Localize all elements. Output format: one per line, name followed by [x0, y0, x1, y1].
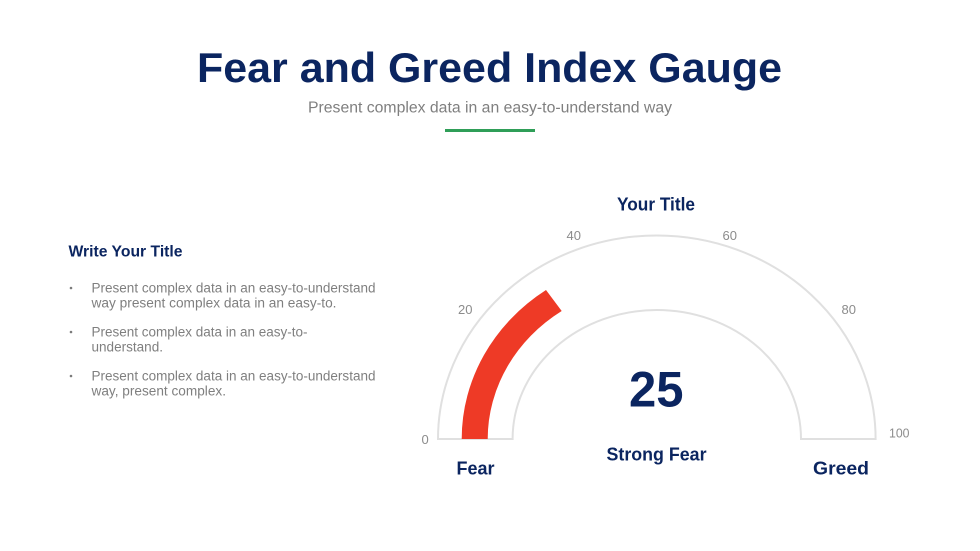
bullet 3: way, present complex.	[90, 384, 226, 398]
text column heading: Write Your Title	[68, 244, 183, 260]
gauge heading: Your Title	[617, 194, 695, 214]
greed label: Greed	[813, 458, 869, 478]
bullet 3	[70, 368, 375, 398]
fear label: Fear	[456, 458, 494, 478]
scale labels	[422, 228, 910, 447]
gauge track outline	[438, 235, 876, 439]
scale labels: 80	[842, 302, 856, 317]
scale labels: 60	[722, 228, 737, 243]
title: Fear and Greed Index Gauge	[197, 44, 782, 91]
subtitle: Present complex data in an easy-to-understand way	[308, 100, 672, 116]
bullet 1	[70, 280, 375, 310]
panel: text column	[68, 244, 376, 398]
gauge value arc	[462, 290, 562, 439]
panel: gauge chart	[422, 194, 910, 478]
gauge value: 25	[629, 362, 684, 418]
bullet 3: Present complex data in an easy-to-understand	[92, 368, 376, 384]
bullet 2	[70, 324, 308, 354]
scale labels: 40	[566, 228, 581, 243]
scale labels: 20	[458, 302, 472, 317]
bullet 1: Present complex data in an easy-to-understand	[92, 280, 376, 296]
scale labels: 100	[889, 426, 910, 440]
bullet 2: understand.	[92, 340, 163, 354]
gauge status label: Strong Fear	[606, 444, 706, 464]
bullet 1: way present complex data in an easy-to.	[90, 296, 336, 310]
bullet 2: Present complex data in an easy-to-	[92, 324, 308, 340]
scale labels: 0	[422, 432, 429, 447]
green accent underline	[445, 129, 535, 132]
